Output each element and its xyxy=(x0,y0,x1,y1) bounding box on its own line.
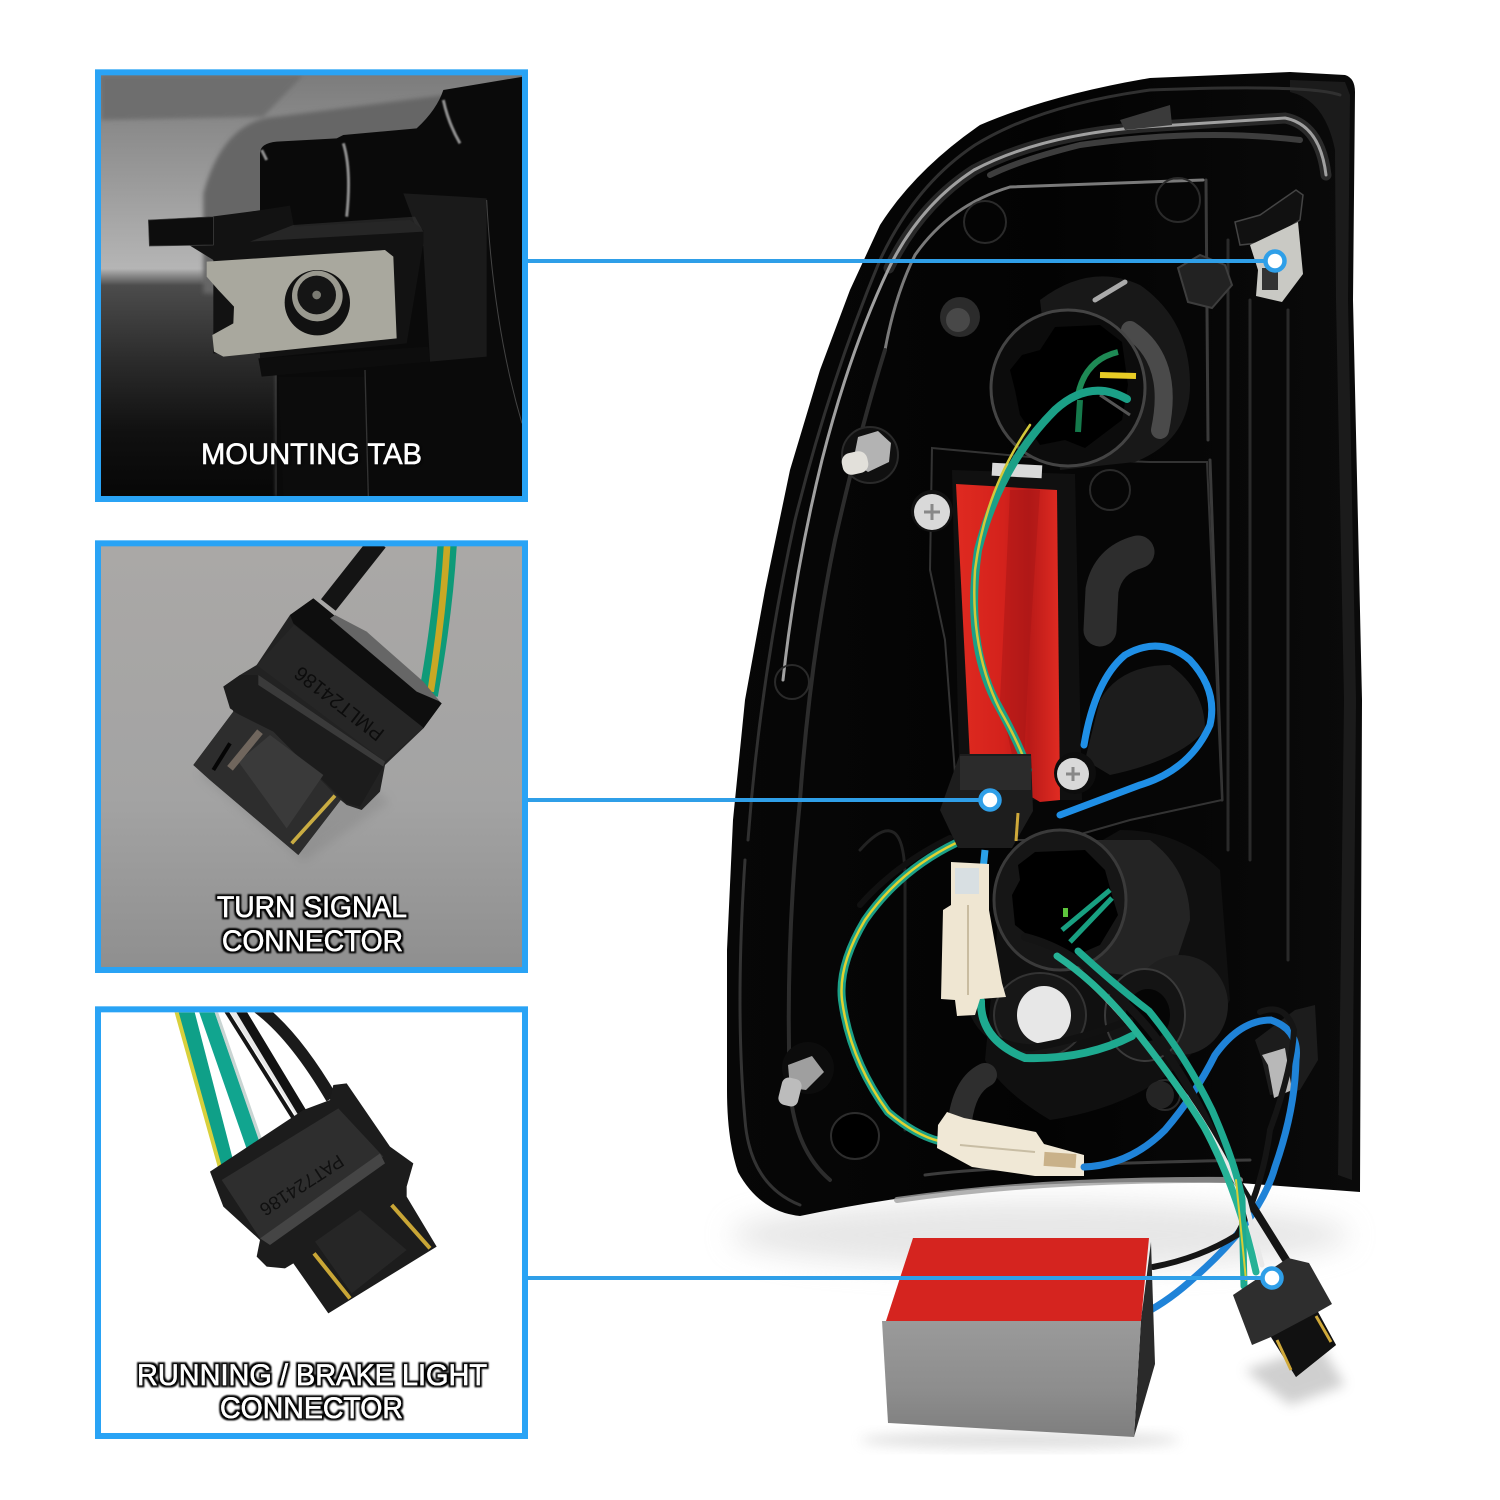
flange ridge xyxy=(260,1153,385,1245)
blue loop wire xyxy=(1060,646,1212,815)
box red top xyxy=(886,1238,1149,1321)
callout line: running brake connector xyxy=(527,1268,1282,1288)
callout line: mounting tab xyxy=(527,252,1284,270)
upper green yellow wire xyxy=(974,391,1127,770)
panel border xyxy=(98,72,525,499)
blue harness wire xyxy=(1084,1020,1296,1313)
photo background xyxy=(101,546,522,967)
lower clip xyxy=(1255,1005,1318,1098)
lower fastener xyxy=(1146,1081,1174,1109)
panel: turn signal connector xyxy=(98,542,525,970)
box side xyxy=(1134,1242,1155,1437)
dome fastener xyxy=(940,297,980,337)
black wire xyxy=(328,542,378,605)
gloss highlights xyxy=(262,100,460,217)
moulded part number: PMLT24186 xyxy=(291,661,389,745)
callout wire bundle xyxy=(1025,937,1288,1286)
tail light housing xyxy=(727,72,1362,1313)
central raised block xyxy=(930,448,1222,840)
upper socket barrel xyxy=(991,276,1190,470)
lower loop wires xyxy=(972,1001,1132,1058)
black harness wire right xyxy=(1153,1009,1294,1267)
turn signal connector on housing xyxy=(940,754,1033,848)
callout line: turn signal connector xyxy=(527,790,1000,810)
bottom left hole xyxy=(831,1113,879,1159)
rear grommet xyxy=(1085,665,1205,775)
moulded part number: PAT724186 xyxy=(256,1151,348,1220)
photo background xyxy=(101,1012,522,1433)
panel border xyxy=(98,543,525,970)
short blue jumper xyxy=(983,850,985,870)
connector rear collar xyxy=(290,598,442,728)
wires inside upper socket xyxy=(1078,352,1136,432)
stud upper xyxy=(840,427,898,483)
red adhesive strip xyxy=(956,484,1060,802)
dark nut near mounting tab xyxy=(1178,255,1232,308)
label: running brake light: RUNNING / BRAKE LIGHT xyxy=(137,1359,487,1392)
screw upper xyxy=(911,490,953,532)
blurred backdrop forms xyxy=(101,75,523,497)
mounting tab clip xyxy=(1235,190,1303,302)
screw lower xyxy=(1054,752,1096,794)
panel: mounting tab xyxy=(98,72,525,499)
connector plug front xyxy=(193,712,341,855)
connector flange xyxy=(223,675,240,710)
lower socket xyxy=(994,830,1190,980)
dark housing wall xyxy=(260,77,523,497)
connector silhouette xyxy=(210,1083,437,1313)
connector silhouette xyxy=(193,598,442,855)
module label xyxy=(992,463,1042,478)
turn signal wire lower green yellow xyxy=(841,838,956,1141)
control module on housing xyxy=(952,463,1082,802)
infographic canvas xyxy=(95,69,1362,1453)
panel border xyxy=(98,1009,525,1436)
label: connector: CONNECTOR xyxy=(220,1392,403,1425)
green yellow wire xyxy=(428,542,447,695)
photo background xyxy=(101,75,522,496)
small elbow grommet xyxy=(960,1075,985,1120)
housing silhouette xyxy=(727,72,1362,1216)
panel: running brake connector xyxy=(98,1007,525,1436)
gold pin xyxy=(292,796,335,843)
bolt recess xyxy=(285,270,350,335)
gold pins xyxy=(314,1205,430,1298)
right lower socket xyxy=(1105,955,1228,1061)
tab arm xyxy=(188,210,260,354)
top right rim band xyxy=(1290,80,1356,1180)
label: mounting tab: MOUNTING TAB xyxy=(201,438,422,471)
lower socket area gloss xyxy=(985,830,1230,1120)
stud lower xyxy=(777,1042,834,1108)
module box xyxy=(882,1238,1155,1437)
white inline connector vertical xyxy=(941,862,1006,1016)
lower block xyxy=(258,358,277,376)
vertical stem xyxy=(278,377,367,497)
contact slot xyxy=(230,732,260,768)
connector top face xyxy=(222,1108,383,1238)
metal plate xyxy=(207,250,397,357)
connector upper body xyxy=(256,664,423,728)
soft shadow and reflection beneath the lamp xyxy=(730,1201,1350,1449)
top edge notch detail xyxy=(1120,105,1172,130)
label: turn signal: TURN SIGNAL xyxy=(217,891,407,924)
white inline connector horizontal xyxy=(937,1112,1084,1176)
wires xyxy=(176,1007,332,1170)
running brake connector on harness xyxy=(1233,1258,1336,1377)
label: connector: CONNECTOR xyxy=(222,925,403,958)
box grey front xyxy=(882,1321,1141,1437)
soft connector shadow xyxy=(206,776,384,856)
lower hole with white background xyxy=(994,973,1086,1057)
block side xyxy=(403,193,487,362)
rim highlight curves xyxy=(740,88,1340,1205)
rubber hose xyxy=(1100,552,1138,630)
connector plug recess xyxy=(315,1210,407,1293)
circular mould marks xyxy=(775,178,1200,1110)
